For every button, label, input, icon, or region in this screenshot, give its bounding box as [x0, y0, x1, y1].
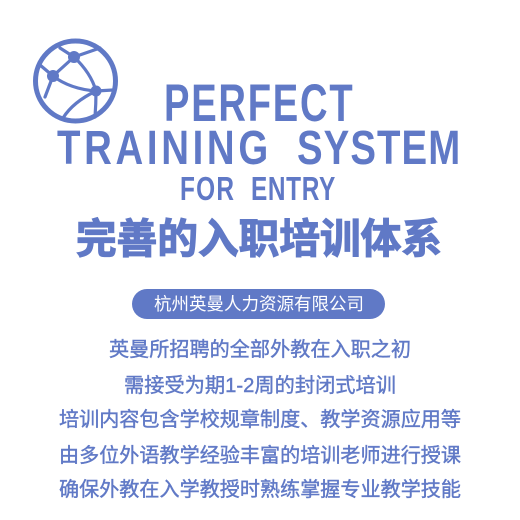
heading: TRAINING SYSTEM: TRAINING — [57, 122, 268, 175]
company name pill: 杭州英曼人力资源有限公司 — [154, 294, 364, 314]
body text: 由多位外语教学经验丰富的培训老师进行授课 — [59, 444, 461, 467]
heading: FOR ENTRY — [180, 172, 335, 208]
heading: FOR ENTRY: ENTRY — [251, 172, 335, 208]
body text: 确保外教在入学教授时熟练掌握专业教学技能 — [59, 478, 461, 501]
body text: 培训内容包含学校规章制度、教学资源应用等 — [59, 408, 461, 431]
body text — [59, 338, 461, 501]
heading: PERFECT: PERFECT — [164, 73, 353, 132]
body text: 英曼所招聘的全部外教在入职之初 — [109, 338, 411, 361]
body text: 需接受为期1-2周的封闭式培训 — [124, 374, 396, 397]
heading: TRAINING SYSTEM: SYSTEM — [297, 122, 460, 175]
heading: TRAINING SYSTEM — [57, 122, 460, 175]
heading: Chinese title: 完善的入职培训体系 — [76, 216, 442, 262]
icon: network globe — [36, 41, 116, 121]
company name pill — [132, 289, 385, 319]
heading: FOR ENTRY: FOR — [180, 172, 234, 208]
